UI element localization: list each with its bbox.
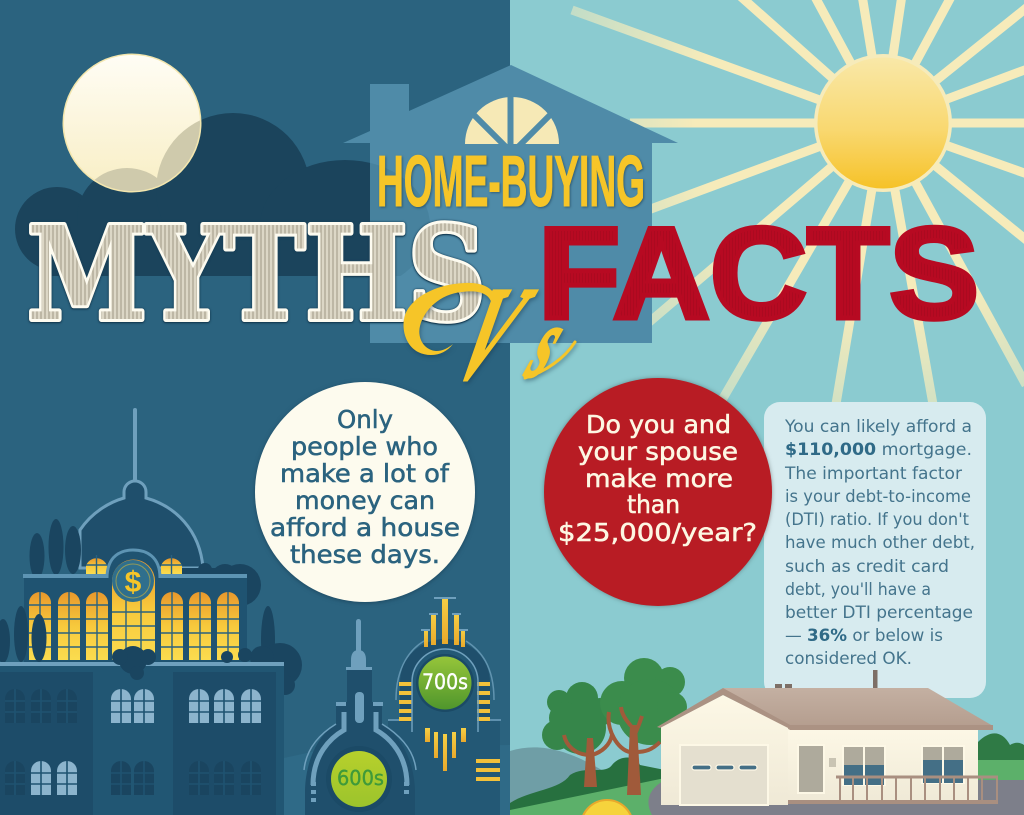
fact bubble [544, 378, 772, 606]
house roof [723, 688, 993, 730]
mansion dome and spire [80, 408, 203, 568]
tower side bars [399, 682, 500, 781]
tower spire [346, 619, 372, 670]
fact explanation text: debt, you'll have a [785, 580, 931, 600]
sun with rays [572, 0, 1024, 410]
house main wall [786, 727, 978, 803]
distant hill [284, 745, 510, 815]
badge: 700s [416, 654, 474, 712]
myth bubble [255, 382, 475, 602]
heading: Vs: V [434, 259, 548, 407]
tree left [542, 682, 614, 787]
badge: 600s: 600s [337, 766, 384, 790]
fact explanation text: You can likely afford a [784, 417, 972, 437]
myth text: people who [291, 432, 438, 461]
myth text: afford a house [270, 513, 460, 542]
fact question text: make more [585, 464, 733, 493]
house fan window [465, 97, 559, 154]
ranch house [657, 670, 998, 805]
coin partly visible [581, 800, 633, 815]
fact question text: than [627, 490, 680, 519]
icon: dollar medallion: $ [125, 566, 142, 599]
lawn and hedges [510, 758, 665, 815]
fact explanation text: considered OK. [785, 649, 912, 669]
sun rays [572, 0, 1024, 410]
right green hills [978, 733, 1024, 790]
icon: dollar medallion [112, 560, 154, 602]
heading: Home-Buying: HOME-BUYING [377, 142, 645, 222]
fact question text: $25,000/year? [558, 518, 757, 547]
mansion lower storey [0, 662, 284, 815]
heading: Myths: MYTHS [27, 199, 486, 350]
tower: 700s [388, 597, 501, 815]
tower body [388, 640, 500, 815]
heading: Vs [404, 259, 597, 407]
mansion centre bush [112, 646, 252, 680]
tower body [305, 670, 415, 815]
fact explanation text: $110,000 mortgage. [785, 440, 972, 460]
fact explanation text: (DTI) ratio. If you don't [785, 510, 969, 530]
house pipes [775, 670, 878, 696]
mansion upper storey [23, 550, 247, 662]
badge: 600s [326, 746, 392, 812]
fact explanation text: such as credit card [785, 557, 949, 577]
fact question text: Do you and [586, 410, 731, 439]
fact question text [558, 410, 757, 547]
background: facts side [510, 0, 1024, 815]
fact explanation text: have much other debt, [785, 533, 975, 553]
myth text: Only [337, 405, 393, 434]
heading: Facts: FACTS [538, 200, 979, 346]
heading: Vs: s [512, 287, 584, 398]
badge: 700s: 700s [422, 670, 468, 694]
mansion bushes [178, 563, 302, 695]
tower: 600s [304, 619, 416, 815]
fact callout panel [764, 402, 986, 698]
garage [657, 688, 792, 805]
mansion cypress trees upper [30, 519, 275, 674]
tower gold crown bars [421, 597, 468, 647]
fact explanation text: is your debt-to-income [785, 487, 971, 507]
house silhouette behind title [343, 65, 678, 343]
fact explanation text: better DTI percentage [785, 603, 973, 623]
grey hill [510, 747, 660, 815]
window left [843, 746, 885, 785]
mansion cypress trees lower [0, 606, 28, 663]
moon [62, 54, 202, 192]
myth text: make a lot of [280, 459, 450, 488]
fact explanation text: The important factor [784, 464, 962, 484]
fact explanation text [784, 417, 975, 669]
tree right [600, 658, 687, 795]
fact question text: your spouse [578, 437, 738, 466]
sun disc [814, 54, 952, 192]
road [648, 780, 1024, 815]
mansion illustration [0, 408, 302, 815]
background: myths side [0, 0, 510, 815]
tower details [304, 712, 416, 785]
myth text: these days. [290, 540, 440, 569]
fact explanation text: — 36% or below is [785, 626, 943, 646]
night cloud [15, 113, 430, 292]
suburban landscape [510, 658, 1024, 815]
front door [798, 745, 836, 793]
myth text [270, 405, 460, 569]
tower lower bars [425, 728, 466, 771]
porch railing [788, 777, 998, 802]
window right [922, 746, 964, 783]
myth text: money can [295, 486, 435, 515]
tree in front of window [32, 614, 46, 662]
